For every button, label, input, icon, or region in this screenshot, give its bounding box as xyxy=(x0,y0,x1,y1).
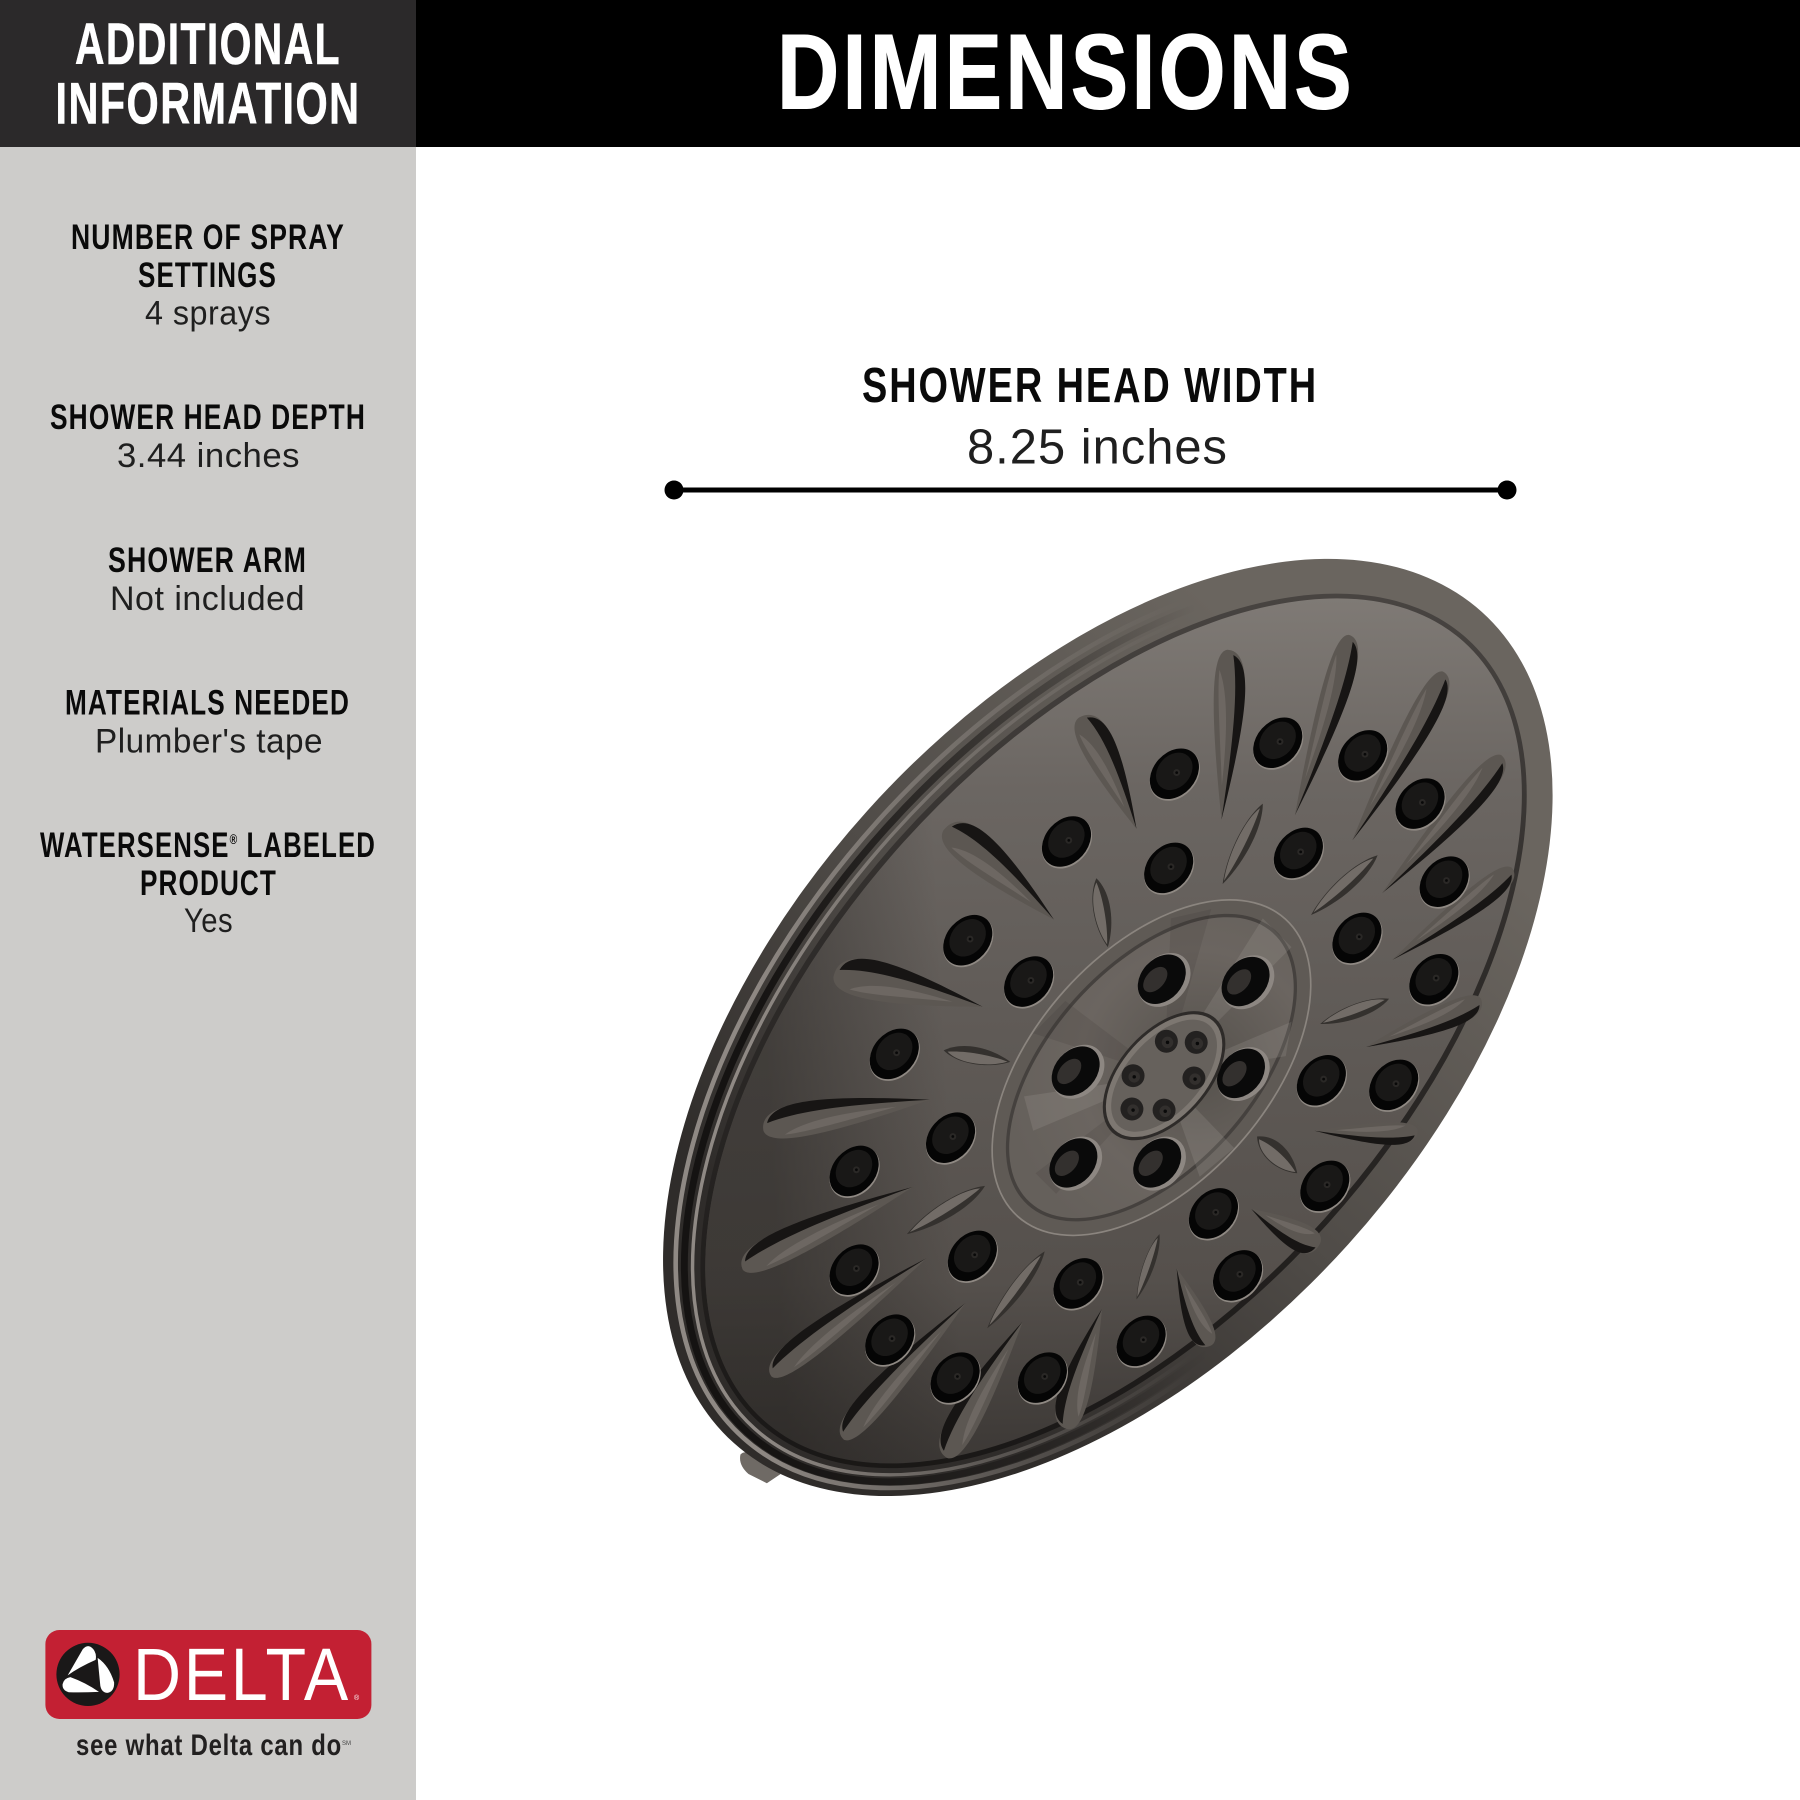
width label: SHOWER HEAD WIDTH xyxy=(862,359,1318,413)
center plate and nozzles xyxy=(1079,989,1249,1163)
spec: number of spray settings: NUMBER OF SPRAY xyxy=(71,218,345,257)
spec: watersense labeled product: Yes xyxy=(184,902,233,940)
mounting nub xyxy=(740,1452,781,1483)
spec: shower head depth: 3.44 inches xyxy=(117,437,300,475)
spec: watersense labeled product: PRODUCT xyxy=(140,864,277,903)
center large holes xyxy=(1039,942,1285,1201)
spec: shower arm: SHOWER ARM xyxy=(108,541,307,580)
small petals xyxy=(903,800,1392,1333)
spec: shower arm: Not included xyxy=(110,580,305,618)
spec: number of spray settings: 4 sprays xyxy=(145,294,271,332)
dimension line xyxy=(664,480,1516,500)
header: additional information xyxy=(0,0,416,147)
outer petals xyxy=(734,632,1522,1464)
width label: 8.25 inches xyxy=(967,420,1228,474)
logo: delta: ® xyxy=(354,1694,360,1702)
outer ring of spray holes xyxy=(819,708,1480,1415)
spec: number of spray settings xyxy=(71,218,345,332)
body and rim xyxy=(493,395,1722,1660)
logo: delta xyxy=(45,1630,371,1762)
spec: watersense labeled product xyxy=(40,826,376,940)
spec: shower head depth: SHOWER HEAD DEPTH xyxy=(50,398,366,437)
spec: materials needed xyxy=(65,684,350,760)
spec: materials needed: MATERIALS NEEDED xyxy=(65,684,350,722)
spec: shower arm xyxy=(108,541,307,618)
center ring xyxy=(930,840,1373,1295)
header: additional information: ADDITIONAL xyxy=(75,12,341,77)
spec: watersense labeled product: LABELED xyxy=(238,826,376,865)
spec: materials needed: Plumber's tape xyxy=(95,722,323,760)
title bar: dimensions xyxy=(416,0,1800,147)
spec: number of spray settings: SETTINGS xyxy=(138,256,277,295)
logo: delta: DELTA xyxy=(133,1633,351,1716)
shower head xyxy=(493,395,1722,1660)
header: additional information: INFORMATION xyxy=(56,72,360,136)
spec: shower head depth xyxy=(50,398,366,475)
panel: additional information sidebar xyxy=(0,0,416,1800)
logo: delta: see what Delta can do xyxy=(76,1729,342,1762)
spec: watersense labeled product: ® xyxy=(230,831,238,847)
width label xyxy=(862,359,1318,474)
spec: watersense labeled product: WATERSENSE xyxy=(40,826,297,865)
middle ring of spray holes xyxy=(916,818,1393,1321)
logo: delta: SM xyxy=(342,1741,351,1747)
title bar: dimensions: DIMENSIONS xyxy=(777,12,1355,132)
